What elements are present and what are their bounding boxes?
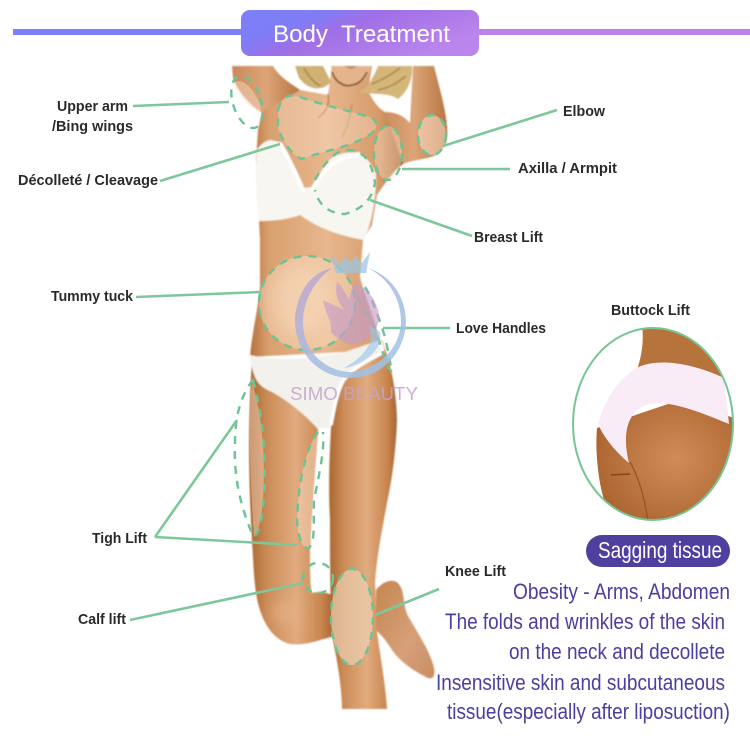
zone: outer thigh bbox=[235, 380, 265, 537]
zone: knee bbox=[331, 569, 373, 665]
soft body highlight bbox=[272, 264, 328, 336]
panties bbox=[250, 340, 383, 428]
leader lines bbox=[130, 102, 557, 620]
zone: breast bbox=[315, 150, 375, 214]
bent leg bbox=[249, 360, 334, 644]
title pill bbox=[241, 10, 479, 56]
body labels: Axilla / Armpit bbox=[518, 160, 617, 177]
zone: love handles bbox=[356, 287, 392, 372]
sagging tissue pill: Sagging tissue bbox=[598, 537, 722, 563]
body labels: Elbow bbox=[563, 103, 605, 120]
torso bbox=[250, 66, 403, 357]
body labels: Breast Lift bbox=[474, 229, 543, 246]
hair bbox=[295, 66, 331, 88]
zone: calf bbox=[303, 563, 333, 593]
sagging tissue pill bbox=[586, 535, 730, 567]
left arm bbox=[232, 66, 300, 130]
zone: tummy bbox=[259, 256, 355, 350]
bra bbox=[256, 140, 376, 240]
zone: inner thigh bbox=[297, 432, 323, 549]
body labels bbox=[18, 98, 617, 628]
treatment zones bbox=[225, 72, 446, 665]
buttock lift heading: Buttock Lift bbox=[611, 302, 690, 319]
zone: upper arm bbox=[225, 72, 269, 132]
body labels: Tigh Lift bbox=[92, 530, 147, 547]
body labels: Décolleté / Cleavage bbox=[18, 172, 158, 189]
zone: decollete bbox=[278, 95, 376, 159]
header band bbox=[13, 10, 750, 56]
logo ring bbox=[295, 268, 406, 378]
body labels: /Bing wings bbox=[52, 118, 133, 135]
description text bbox=[436, 579, 730, 724]
body labels: Knee Lift bbox=[445, 563, 506, 580]
watermark text: SIMO BEAUTY bbox=[290, 384, 418, 404]
panel: buttock lift circle bbox=[570, 325, 740, 530]
standing leg bbox=[329, 340, 397, 709]
body labels: Calf lift bbox=[78, 611, 126, 628]
body labels: Upper arm bbox=[57, 98, 128, 115]
knee highlight bbox=[271, 600, 299, 624]
logo crown bbox=[330, 252, 370, 273]
zone: elbow bbox=[418, 115, 446, 155]
logo swoosh bbox=[344, 325, 380, 368]
logo face bbox=[323, 282, 379, 344]
watermark logo bbox=[290, 252, 418, 404]
foot bbox=[376, 581, 434, 678]
zone: armpit bbox=[374, 126, 402, 180]
body labels: Tummy tuck bbox=[51, 288, 134, 305]
right arm bbox=[380, 66, 447, 180]
title pill: Body Treatment bbox=[273, 21, 450, 48]
body figure bbox=[232, 66, 447, 709]
chin bbox=[331, 66, 371, 86]
neck shadows bbox=[318, 94, 329, 118]
body labels: Love Handles bbox=[456, 320, 546, 337]
